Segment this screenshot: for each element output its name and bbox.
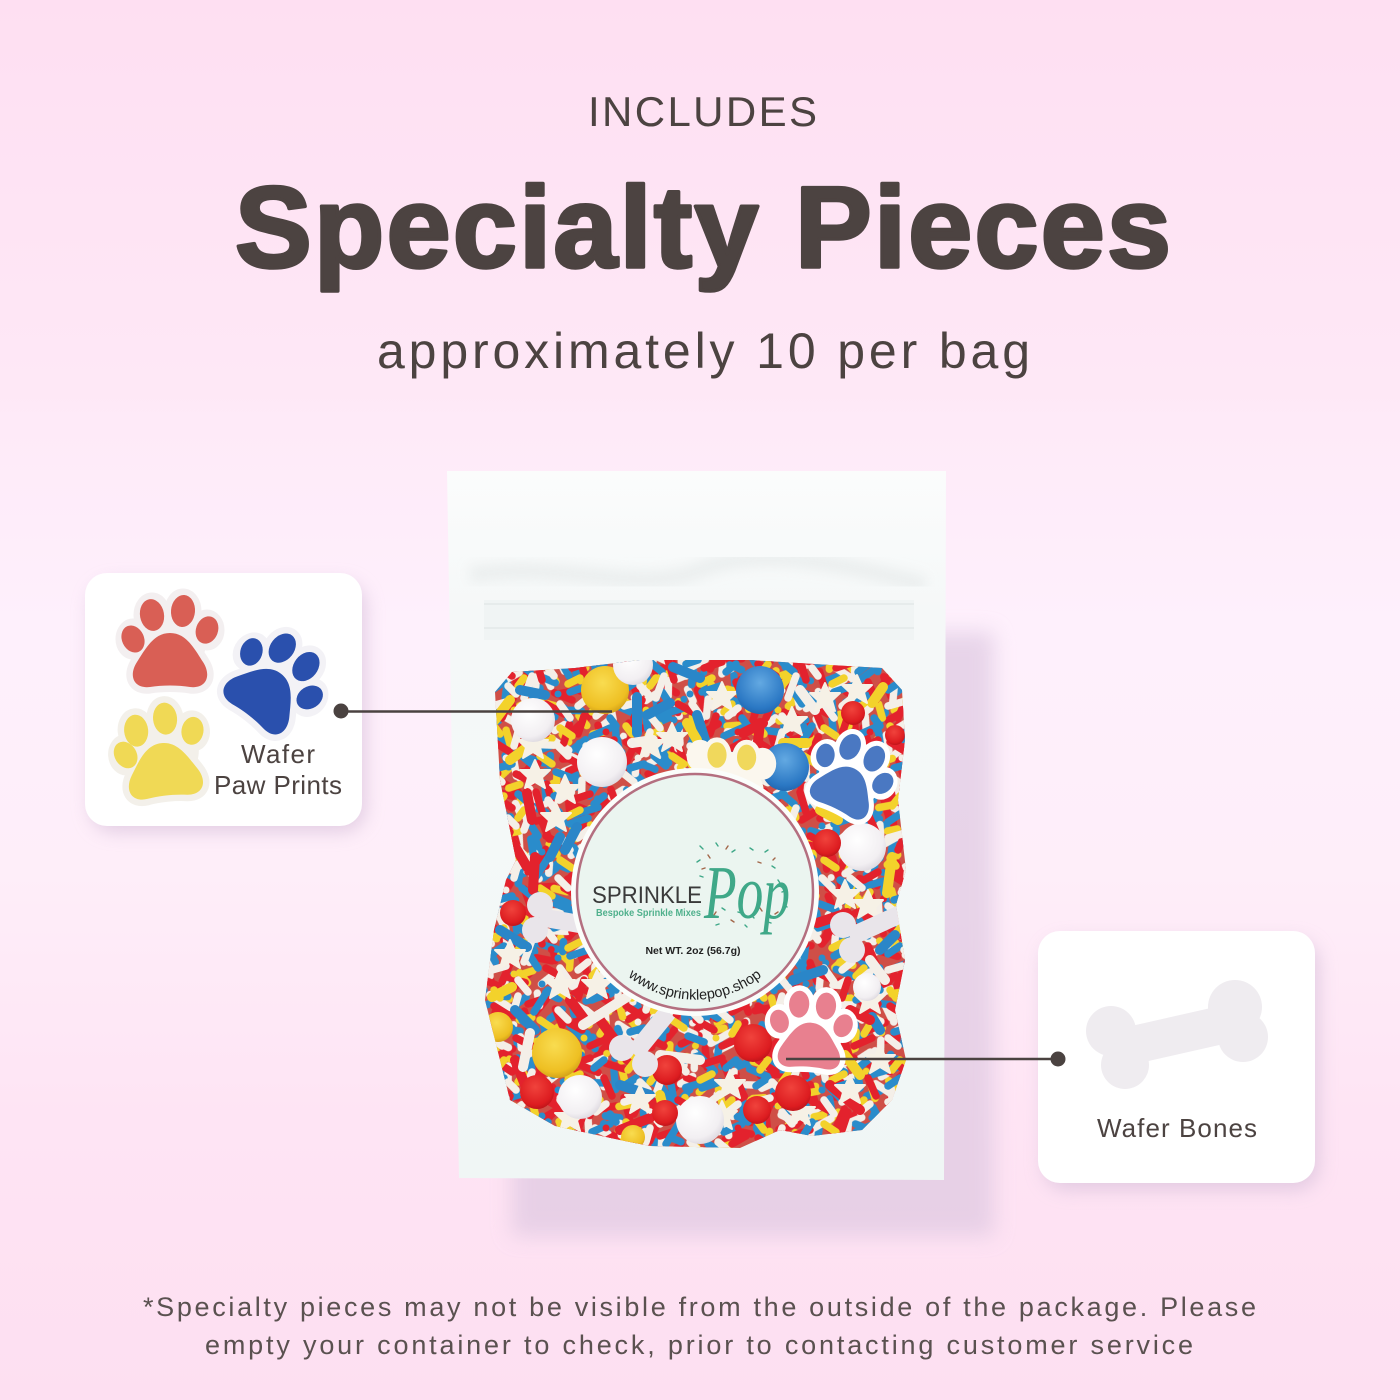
card shadow [1043, 940, 1319, 1190]
bag wafer bones [522, 892, 905, 1077]
card label: Wafer Bones [1097, 1113, 1257, 1143]
bag seal [470, 558, 925, 640]
icon: bone [1086, 980, 1268, 1089]
footnote [143, 1292, 1256, 1360]
card shadow [90, 582, 366, 832]
bag shadow [512, 632, 994, 1236]
stars [495, 675, 895, 1131]
subtitle: approximately 10 per bag [377, 323, 1030, 379]
leader line: bones [786, 1052, 1066, 1066]
sprinkle mix [480, 645, 910, 1155]
brand script: Pop [703, 851, 790, 935]
bag paw: yellow [691, 742, 771, 800]
icon: red paw [117, 594, 222, 687]
round brand label [571, 768, 819, 1016]
footnote: *Specialty pieces may not be visible from the outside of the package. Please [143, 1292, 1256, 1322]
card label [214, 739, 342, 800]
bag paw: blue [794, 721, 908, 829]
leader line: paws [334, 704, 612, 718]
confetti dots [697, 843, 787, 927]
product bag [447, 471, 946, 1180]
net weight: Net WT. 2oz (56.7g) [645, 945, 741, 957]
callout: wafer bones [1038, 931, 1319, 1190]
sugar pearls [483, 645, 905, 1149]
brand name: SPRINKLE [592, 882, 702, 909]
icon: blue paw [207, 613, 345, 749]
card label: Wafer [241, 739, 315, 769]
label disc [571, 768, 819, 1016]
large sprinkles [492, 667, 895, 1130]
tagline: Bespoke Sprinkle Mixes [596, 908, 701, 919]
label: includes: INCLUDES [588, 88, 817, 135]
curved url [600, 943, 790, 1000]
bag body [447, 471, 946, 1180]
title: Specialty Pieces [235, 164, 1171, 292]
card [85, 573, 362, 826]
footnote: empty your container to check, prior to contacting customer service [205, 1330, 1193, 1360]
icon: yellow paw [105, 699, 213, 803]
card [1038, 931, 1315, 1183]
callout: wafer paw prints [85, 573, 366, 832]
bag paw: pink [764, 989, 858, 1071]
round brand label: www.sprinklepop.shop [630, 970, 760, 1002]
card label: Paw Prints [214, 770, 342, 800]
